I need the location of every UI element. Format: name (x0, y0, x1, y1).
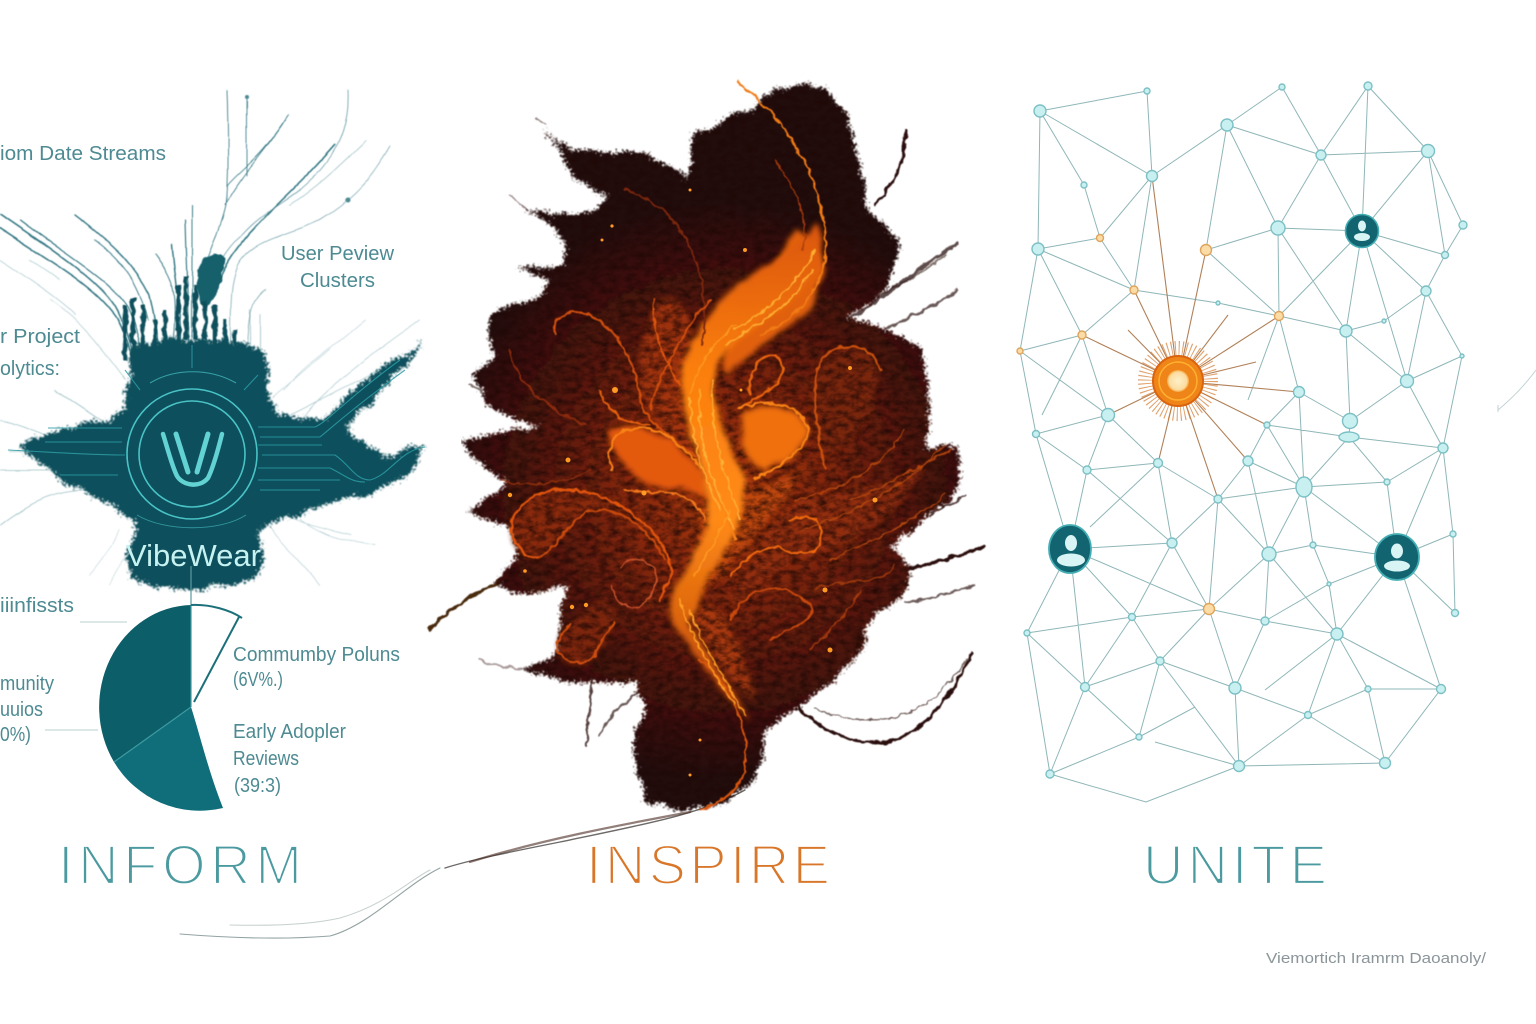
label: insights: iiinfissts (0, 595, 74, 617)
panel: inspire (430, 82, 983, 896)
label: percent: 0%) (0, 724, 31, 746)
embers (508, 188, 878, 776)
logo rings (127, 372, 257, 528)
label: user review clusters: User Peview (281, 243, 395, 265)
network edges (1020, 86, 1463, 802)
label: data streams: iom Date Streams (0, 143, 166, 165)
pie chart (45, 566, 242, 811)
bright flame lobes (610, 230, 823, 495)
right edge wisp (1498, 370, 1536, 412)
fibres above hub (125, 275, 235, 365)
footer note: Viemortich Iramrm Daoanoly/ (1266, 950, 1487, 967)
warm nodes (1017, 234, 1284, 614)
fire silhouette (461, 86, 960, 809)
swirl lines (500, 82, 950, 810)
label: community: munity (0, 673, 54, 695)
icon: V logo (163, 434, 222, 485)
icon: person node left (1049, 525, 1091, 573)
fire body with flame lobes (461, 86, 960, 809)
flame lobes (512, 299, 925, 700)
label: polls percent: (6V%.) (233, 669, 283, 691)
lower-left scrolls (511, 490, 672, 600)
teal hub blob (18, 339, 425, 589)
icon: central orange hub (1146, 349, 1210, 413)
label: reviews: Reviews (233, 748, 299, 770)
heading: inform: INFORM (58, 833, 302, 896)
data streams flowing into the hub (0, 90, 420, 585)
heading: inspire: INSPIRE (586, 833, 830, 896)
heading: unite: UNITE (1143, 833, 1327, 896)
circuit traces (8, 345, 425, 490)
label: quiz: uuios (0, 699, 43, 721)
dark plume (196, 253, 225, 305)
brand name: VibeWear (126, 538, 261, 573)
label: community polls: Commumby Poluns (233, 644, 400, 666)
label: project: r Project (0, 326, 80, 348)
panel: unite network (1017, 82, 1536, 896)
tail stroke (180, 790, 745, 938)
icon: person node top right (1346, 214, 1378, 248)
fire wisps (430, 118, 983, 745)
flame ribbon (668, 222, 823, 722)
panel: inform (0, 90, 425, 896)
label: clusters: Clusters (300, 270, 375, 292)
labels (0, 143, 400, 797)
label: analytics: olytics: (0, 358, 60, 380)
label: early adopter: Early Adopler (233, 721, 346, 743)
label: reviews percent: (39:3) (234, 775, 281, 797)
network nodes (1024, 82, 1467, 778)
hub spokes (1082, 176, 1299, 499)
icon: person node right (1375, 534, 1419, 580)
